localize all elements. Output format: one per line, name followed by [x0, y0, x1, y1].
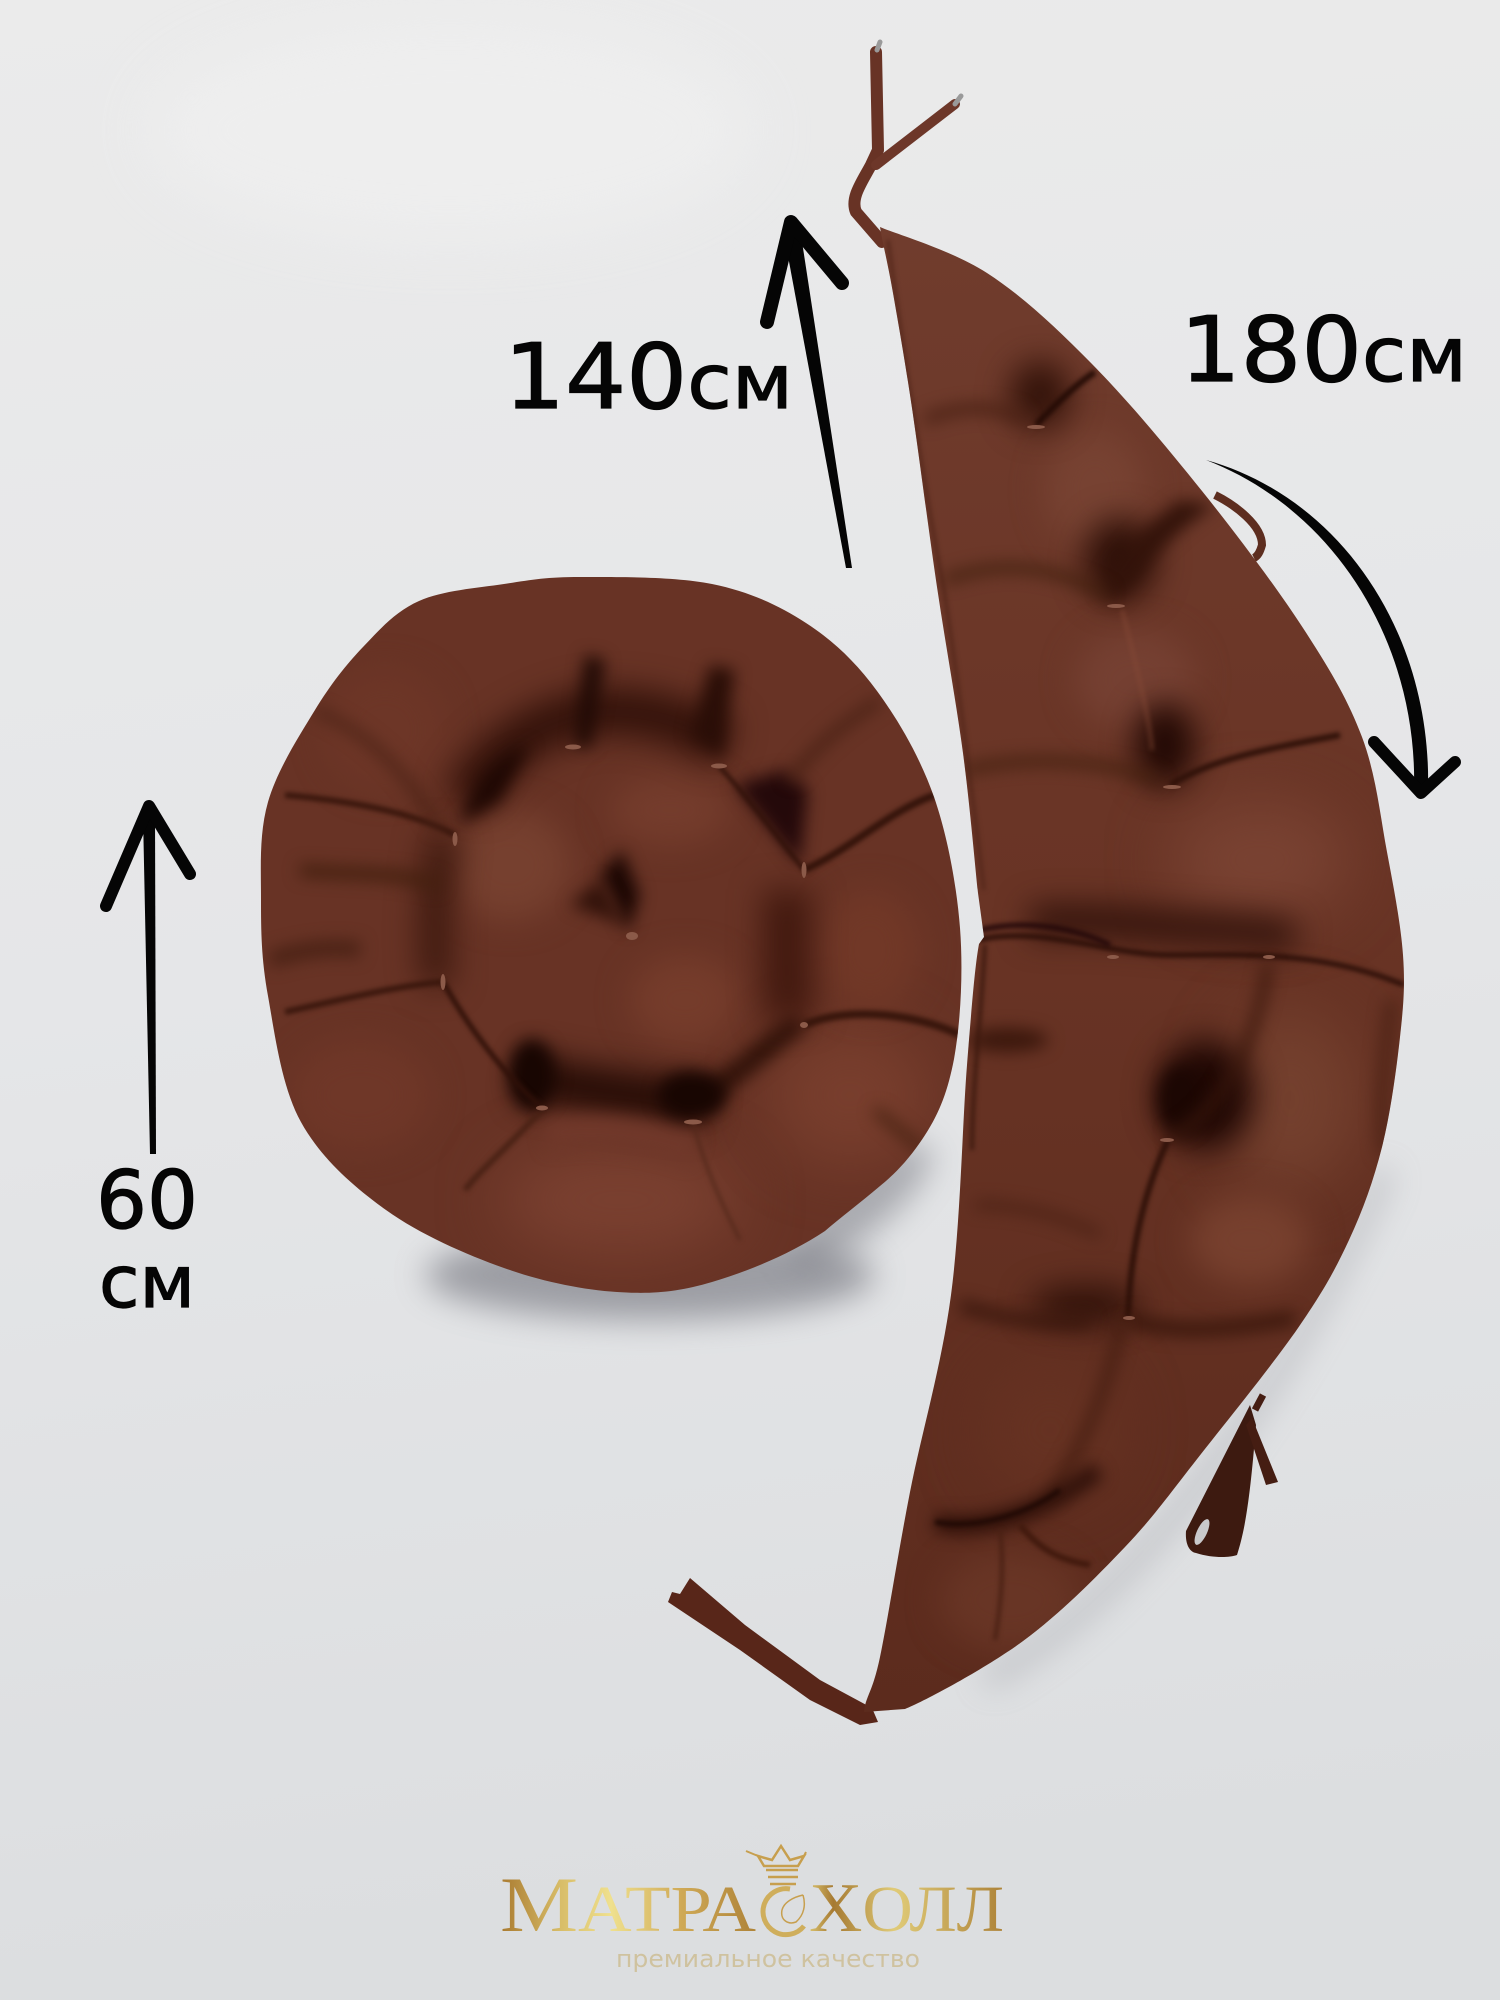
shadow: round cushion — [425, 1126, 947, 1320]
round cushion — [261, 577, 961, 1293]
label: 60: 60 — [96, 1154, 198, 1247]
broad highlights — [512, 1152, 728, 1256]
logo wordmark right: ХОЛЛ — [809, 1870, 1004, 1947]
long cushion — [864, 227, 1404, 1712]
label: 140 cm: 140см — [504, 325, 793, 430]
tufting buttons — [440, 744, 808, 1124]
tie loop lower right — [1186, 1395, 1278, 1557]
inner ring dark bands — [465, 711, 725, 800]
label: 180 cm: 180см — [1180, 298, 1467, 403]
dark tuft wedges — [575, 655, 605, 748]
left seam — [888, 240, 984, 890]
strap bottom — [668, 1578, 878, 1725]
logo emblem crown and crescent — [746, 1846, 806, 1935]
arrow: 140 cm — [767, 222, 852, 568]
dark tuft pools — [1010, 361, 1070, 429]
rim wrinkles — [285, 795, 455, 835]
tie loop upper right — [1215, 495, 1262, 558]
highlights — [1061, 448, 1129, 528]
logo tagline: премиальное качество — [616, 1945, 920, 1973]
strap top — [854, 42, 961, 242]
arrow: 60 cm — [106, 806, 190, 1154]
tufting buttons — [1027, 425, 1275, 1320]
lower ring highlight edge — [545, 1131, 695, 1150]
logo — [500, 1846, 1004, 1973]
arrow: 180 cm — [1206, 460, 1455, 793]
logo wordmark left: МАТРА — [500, 1861, 756, 1948]
shadow: long cushion — [985, 1170, 1385, 1680]
horizontal split crease — [1030, 921, 1295, 938]
label: cm: см — [99, 1240, 195, 1324]
